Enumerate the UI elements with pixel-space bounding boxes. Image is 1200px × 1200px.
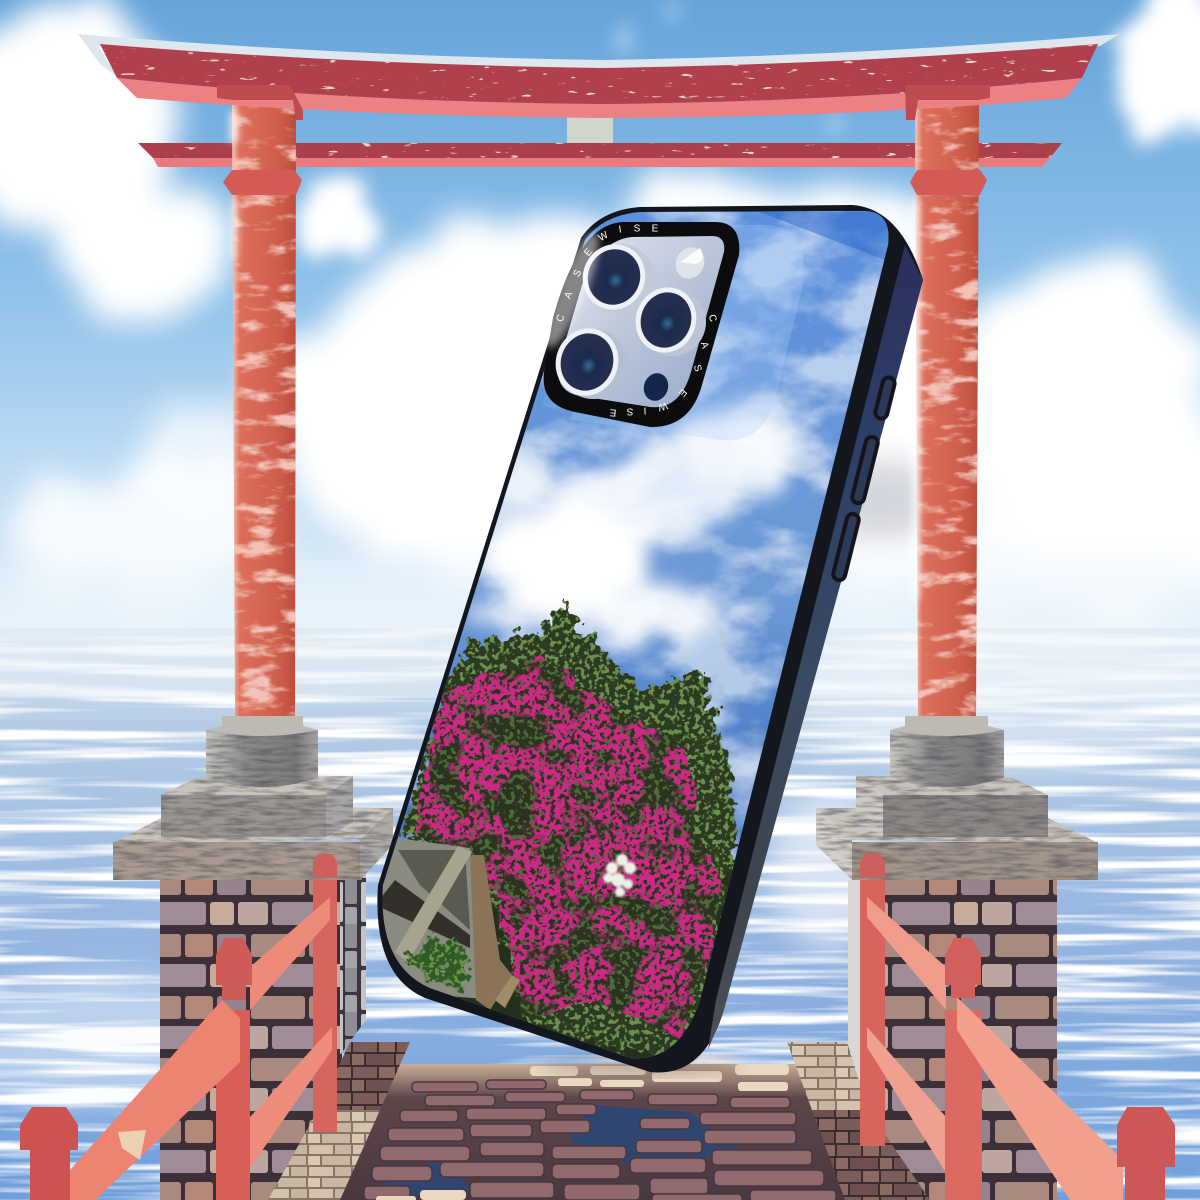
brand text on ring: I — [643, 404, 647, 416]
drum collar — [890, 716, 1004, 736]
side buttons — [832, 376, 896, 581]
lens top — [574, 235, 655, 319]
camera ring — [544, 222, 739, 427]
top corner shade — [760, 212, 890, 262]
main rail — [957, 997, 1123, 1200]
phone back glass photo — [370, 200, 910, 1080]
upper rail — [250, 897, 330, 1010]
middle post — [945, 938, 982, 1200]
right pillar — [915, 105, 979, 718]
brand text on ring: E — [609, 406, 617, 418]
centre strut — [567, 104, 613, 143]
brand text on ring: E — [676, 386, 689, 399]
camera reflection — [570, 225, 804, 440]
stone step — [161, 776, 353, 837]
water — [0, 628, 1200, 1200]
brand text on ring: I — [618, 224, 622, 236]
top beam lower face — [117, 78, 1082, 118]
brand text on ring: E — [652, 224, 659, 234]
bougainvillea flowers — [410, 655, 722, 1040]
brand text on ring — [555, 224, 718, 418]
brick column — [860, 880, 1057, 1200]
left pillar — [232, 105, 296, 718]
paving stones — [364, 1080, 836, 1200]
flash — [671, 243, 709, 283]
left pillar band — [223, 170, 302, 195]
bush foliage — [400, 600, 735, 1065]
puddle reflections — [365, 1105, 740, 1200]
brick column — [160, 880, 342, 1200]
far post — [860, 853, 885, 1146]
right pillar band — [910, 170, 987, 195]
lidar sensor — [640, 370, 672, 404]
lower crossbeam — [138, 143, 1062, 167]
translucent side panel — [708, 245, 923, 1050]
brand text on ring: S — [634, 224, 641, 234]
near post — [20, 1107, 78, 1200]
lower rail — [867, 1027, 946, 1173]
near post — [1117, 1107, 1175, 1200]
lens bottom — [546, 319, 628, 405]
right curb — [787, 1042, 930, 1200]
sky — [0, 0, 1200, 630]
right railing — [860, 853, 1175, 1200]
torii gate — [78, 34, 1120, 718]
clouds — [0, 0, 1200, 630]
brand text on ring: C — [555, 313, 567, 323]
right stone base — [816, 716, 1098, 1200]
camera plate — [558, 236, 724, 407]
sunlit stones — [376, 1064, 789, 1200]
brand text on ring: C — [706, 313, 718, 323]
left pillar collar — [217, 85, 303, 120]
brand text on ring: W — [597, 229, 611, 244]
main rail — [60, 1000, 240, 1200]
drum collar — [206, 716, 318, 736]
brand text on ring: S — [626, 406, 633, 416]
far post — [313, 854, 337, 1132]
left stone base — [113, 716, 393, 1200]
stone step — [856, 776, 1048, 837]
left curb — [268, 1042, 410, 1200]
lower rail — [250, 1027, 332, 1168]
brand text on ring: A — [563, 290, 575, 301]
stone drum — [206, 730, 318, 787]
pillar glow — [230, 112, 919, 600]
stone walkway — [268, 1042, 930, 1200]
phone shadow — [540, 1058, 740, 1074]
white flowers — [603, 854, 636, 897]
top beam — [100, 44, 1098, 104]
stone drum — [890, 730, 1004, 787]
lens right — [627, 279, 706, 361]
worn patch — [118, 1130, 146, 1160]
brand text on ring: S — [691, 364, 703, 373]
lower dark foliage backdrop — [454, 860, 735, 1058]
photo clouds — [370, 200, 910, 1080]
middle post — [216, 938, 252, 1200]
phone case body — [377, 205, 923, 1073]
brand text on ring: W — [656, 399, 669, 413]
brand text on ring: E — [582, 246, 595, 259]
right pillar collar — [905, 85, 990, 120]
brand text on ring: A — [698, 341, 710, 350]
stone slab — [113, 808, 393, 880]
left bloom glare — [536, 227, 608, 353]
pergola — [375, 835, 520, 1010]
top beam upper surface — [78, 34, 1120, 78]
stone slab — [816, 808, 1098, 880]
left railing — [20, 854, 337, 1200]
upper rail — [867, 897, 946, 1010]
phone — [370, 200, 923, 1080]
camera island — [536, 222, 739, 427]
brand text on ring: S — [571, 268, 584, 279]
